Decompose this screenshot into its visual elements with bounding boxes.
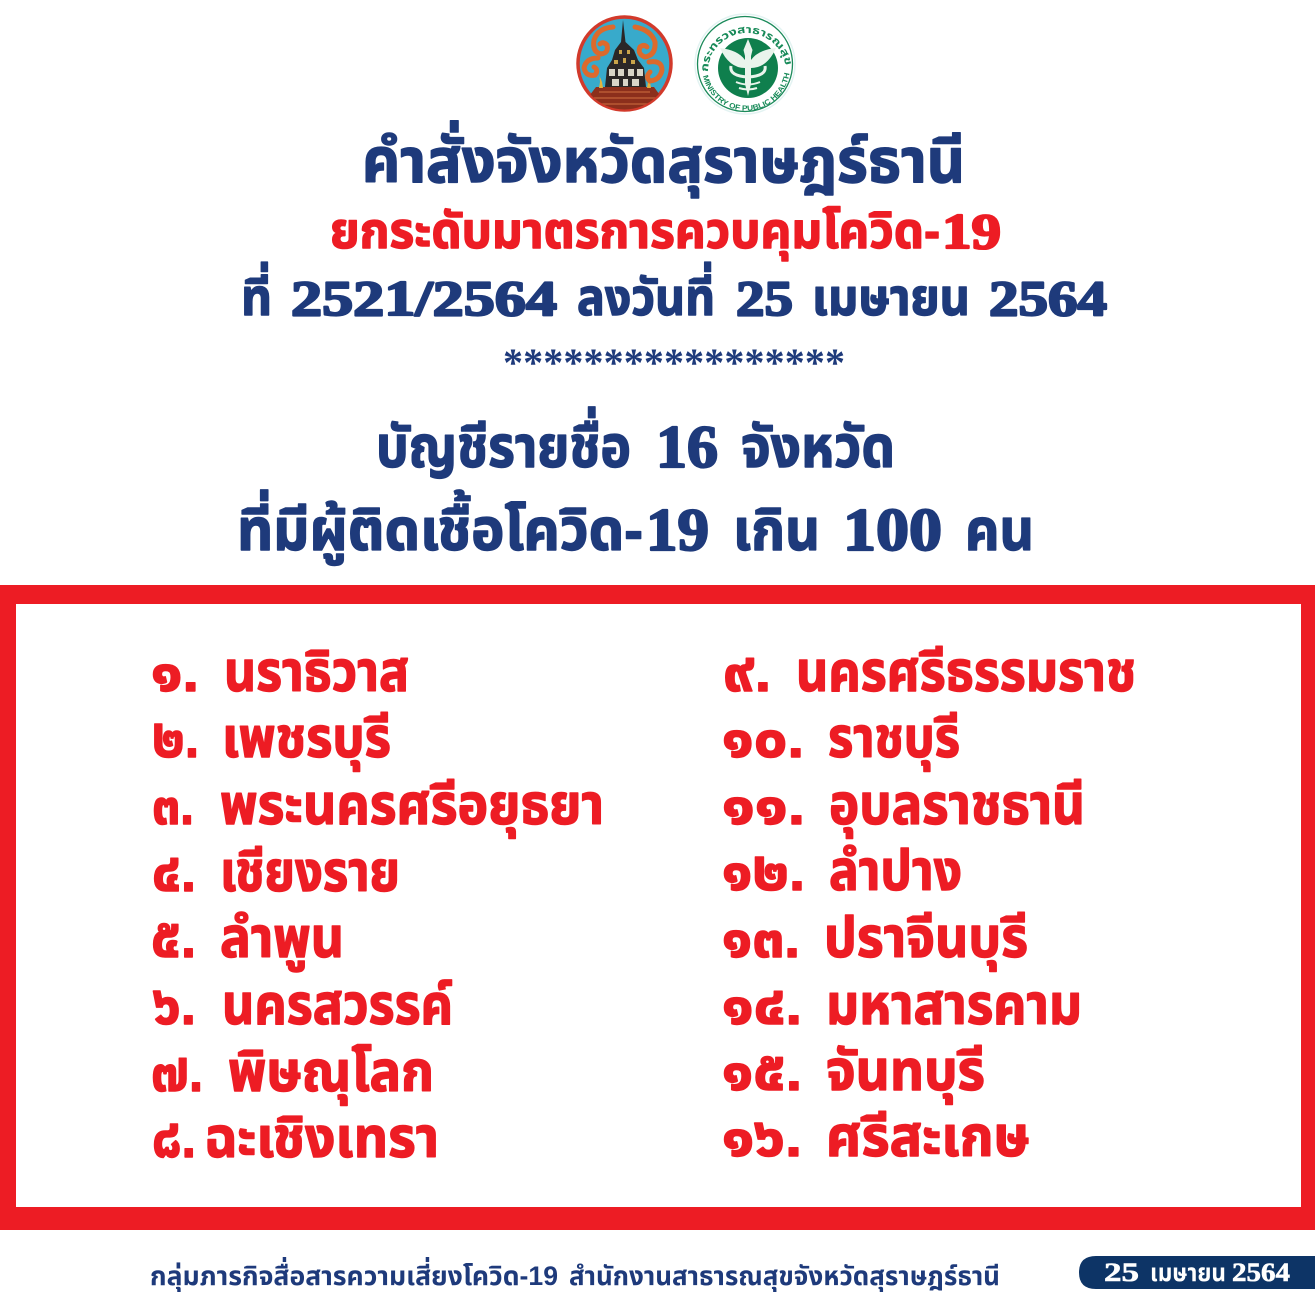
province list: left column: ฉะเชิงเทรา xyxy=(204,1106,439,1169)
heading: more than 100 infected: 100 xyxy=(843,497,942,563)
province list: right column xyxy=(722,640,1136,1168)
order number and date: 25 xyxy=(736,270,793,326)
subtitle: 19 xyxy=(942,203,1001,259)
heading: more than 100 infected: ที่มีผู้ติดเชื้อโควิด- xyxy=(237,489,643,566)
province list: right column: ๙. xyxy=(723,640,771,703)
province list: left column: นราธิวาส xyxy=(224,640,409,703)
order number and date: 2564 xyxy=(989,270,1107,326)
province list: right column: ๑๔. xyxy=(722,973,802,1036)
heading: list of 16 provinces: บัญชีรายชื่อ xyxy=(376,406,631,480)
date badge: เมษายน xyxy=(1150,1259,1226,1287)
province list: right column: ราชบุรี xyxy=(828,706,960,772)
province list: right column: จันทบุรี xyxy=(826,1039,985,1105)
province list: left column: ๕. xyxy=(151,906,196,969)
province list: left column: ๔. xyxy=(152,840,196,903)
heading: list of 16 provinces: 16 xyxy=(656,414,718,480)
province list: left column: นครสวรรค์ xyxy=(222,973,453,1036)
province list: left column: ๓. xyxy=(152,773,194,836)
title: คำสั่งจังหวัดสุราษฎร์ธานี xyxy=(362,120,965,198)
province list: right column: ศรีสะเกษ xyxy=(826,1105,1030,1168)
order number and date: 2521/2564 xyxy=(291,270,557,326)
heading: more than 100 infected: คน xyxy=(965,498,1034,563)
heading: more than 100 infected xyxy=(237,489,1034,566)
asterisk divider: ***************** xyxy=(503,340,845,385)
order number and date: ลงวันที่ xyxy=(577,262,715,326)
province list: left column: เชียงราย xyxy=(220,840,400,903)
panel: red framed province list xyxy=(0,585,1315,1230)
province list: left column: ๑. xyxy=(151,640,199,703)
province list: right column: มหาสารคาม xyxy=(826,973,1082,1036)
province list: left column: พระนครศรีอยุธยา xyxy=(220,773,604,839)
province list: right column: ๑๑. xyxy=(722,773,805,836)
order number and date: เมษายน xyxy=(812,269,970,326)
subtitle: ยกระดับมาตรการควบคุมโควิด- xyxy=(330,203,940,261)
footer credit: กลุ่มภารกิจสื่อสารความเสี่ยงโควิด-19 xyxy=(150,1257,558,1292)
province list: right column: ๑๕. xyxy=(722,1039,802,1102)
province list: left column: ๖. xyxy=(152,973,196,1036)
icon: Ministry of Public Health seal: กระทรวงสาธารณสุข xyxy=(702,26,791,72)
footer credit: สำนักงานสาธารณสุขจังหวัดสุราษฎร์ธานี xyxy=(569,1261,1000,1292)
icon: Ministry of Public Health seal: MINISTRY OF PUBLIC HEALTH xyxy=(703,72,790,110)
province list: right column: ลำปาง xyxy=(829,839,962,902)
province list: right column: นครศรีธรรมราช xyxy=(796,640,1136,703)
footer credit xyxy=(150,1257,1000,1292)
province list: left column: เพชรบุรี xyxy=(222,706,391,772)
province list: left column: ๘. xyxy=(152,1106,196,1169)
heading: list of 16 provinces: จังหวัด xyxy=(741,415,895,480)
province list: left column xyxy=(151,640,604,1169)
province list: left column: ลำพูน xyxy=(220,906,344,972)
province list: right column: ๑๒. xyxy=(722,839,805,902)
order number and date xyxy=(241,262,1107,326)
province list: left column: ๒. xyxy=(152,706,199,769)
icon: Surat Thani provincial seal xyxy=(577,17,672,112)
province list: left column: ๗. xyxy=(151,1040,203,1103)
date badge: 2564 xyxy=(1232,1258,1290,1287)
province list: left column: พิษณุโลก xyxy=(228,1040,434,1106)
province list: right column: ปราจีนบุรี xyxy=(824,906,1028,972)
icon: Ministry of Public Health seal xyxy=(694,13,796,115)
heading: more than 100 infected: 19 xyxy=(646,497,709,563)
date badge xyxy=(1079,1256,1315,1289)
province list: right column: อุบลราชธานี xyxy=(829,773,1085,839)
heading: list of 16 provinces xyxy=(376,406,895,480)
province list: right column: ๑๖. xyxy=(722,1105,802,1168)
heading: more than 100 infected: เกิน xyxy=(733,498,820,563)
order number and date: ที่ xyxy=(241,262,272,326)
province list: right column: ๑๐. xyxy=(722,706,804,769)
date badge: 25 xyxy=(1104,1258,1139,1287)
province list: right column: ๑๓. xyxy=(722,906,800,969)
